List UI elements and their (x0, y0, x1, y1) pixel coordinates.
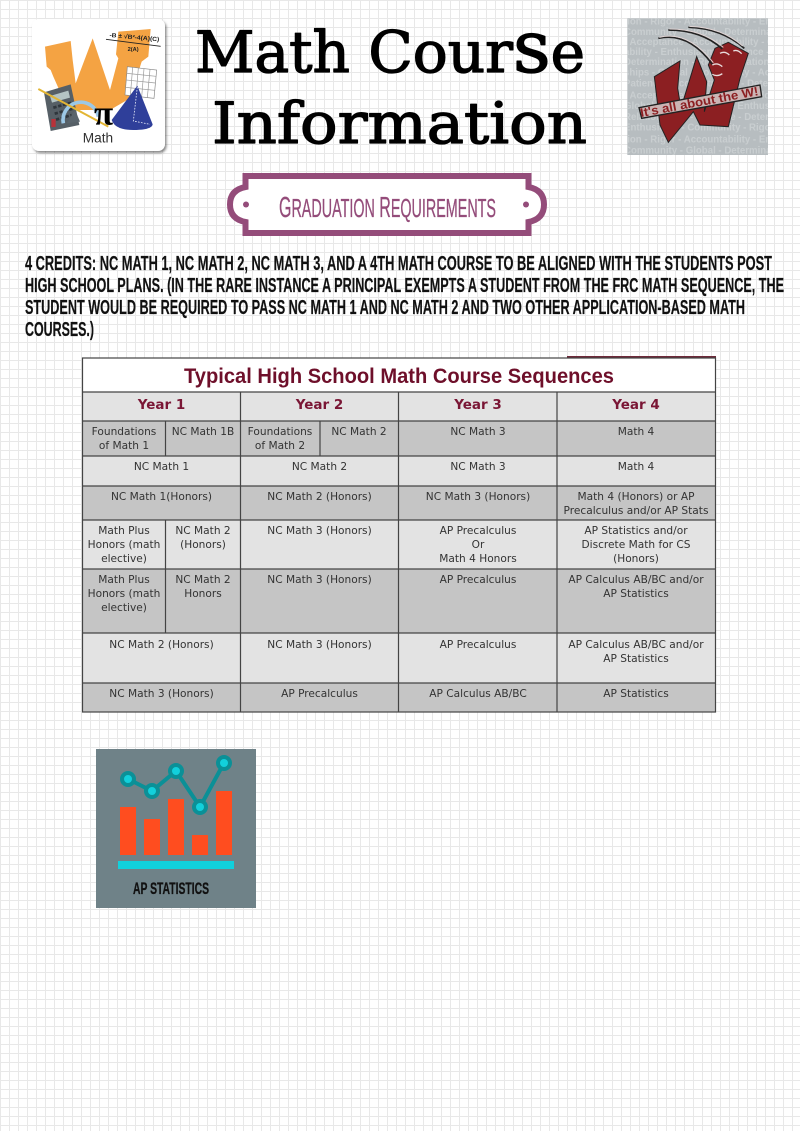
icon: math department logo: 2(A) (128, 47, 139, 53)
row 1: NC Math 2 (331, 426, 387, 438)
row 6: AP Precalculus (440, 639, 516, 651)
row 1: NC Math 1B (172, 426, 234, 438)
icon: AP statistics chart (96, 749, 256, 908)
year headers (137, 397, 660, 413)
row 7 (109, 688, 669, 700)
icon: school W logo (627, 18, 768, 155)
row 1: NC Math 3 (450, 426, 506, 438)
row 5: NC Math 2 (175, 574, 231, 586)
year headers: Year 2 (295, 397, 343, 413)
row 5: AP Calculus AB/BC and/or (568, 574, 704, 586)
banner: graduation requirements: GRADUATION REQUIREMENTS (279, 192, 496, 224)
row 5 (88, 574, 704, 614)
row 2: Math 4 (618, 461, 655, 473)
row 7: AP Calculus AB/BC (429, 688, 527, 700)
row 2: NC Math 1 (134, 461, 189, 473)
row 4: (Honors) (180, 539, 226, 551)
row 6: NC Math 2 (Honors) (109, 639, 214, 651)
row 6 (109, 639, 704, 665)
row 4: elective) (101, 553, 147, 565)
row 7: NC Math 3 (Honors) (109, 688, 214, 700)
row 4: Honors (math (88, 539, 160, 551)
row 1: of Math 1 (99, 440, 149, 452)
row 7: AP Statistics (603, 688, 669, 700)
row 2 (134, 461, 655, 473)
row 5: Math Plus (98, 574, 150, 586)
row 1: Math 4 (618, 426, 655, 438)
row 4: (Honors) (613, 553, 659, 565)
row 4: Discrete Math for CS (581, 539, 691, 551)
row 3 (111, 491, 708, 517)
row 2: NC Math 2 (292, 461, 347, 473)
year headers: Year 4 (611, 397, 660, 413)
row 4: NC Math 3 (Honors) (267, 525, 372, 537)
row 1: Foundations (248, 426, 312, 438)
row 5: NC Math 3 (Honors) (267, 574, 372, 586)
row 7: AP Precalculus (281, 688, 358, 700)
row 6: AP Calculus AB/BC and/or (568, 639, 704, 651)
row 4: Math 4 Honors (439, 553, 517, 565)
title: Information (212, 91, 587, 157)
title: Math Course (195, 5, 585, 89)
row 4: AP Statistics and/or (584, 525, 688, 537)
row 5: Honors (184, 588, 222, 600)
row 4: AP Precalculus (440, 525, 516, 537)
row 3: Precalculus and/or AP Stats (564, 505, 708, 517)
icon: school W logo: It's all about the W! (639, 84, 760, 120)
row 4: Or (472, 539, 485, 551)
row 1 (92, 426, 655, 452)
icon: math department logo: Math (83, 131, 113, 146)
row 5: Honors (math (88, 588, 160, 600)
year headers: Year 1 (137, 397, 185, 413)
text block: credit requirements (25, 253, 784, 341)
row 6: AP Statistics (603, 653, 669, 665)
row 4: Math Plus (98, 525, 150, 537)
text block: credit requirements: COURSES.) (25, 319, 94, 341)
row 5: AP Statistics (603, 588, 669, 600)
row 1: Foundations (92, 426, 156, 438)
table heading: Typical High School Math Course Sequences (184, 365, 614, 388)
icon: math department logo: π (94, 93, 113, 132)
year headers: Year 3 (453, 397, 502, 413)
row 3: NC Math 3 (Honors) (426, 491, 530, 503)
row 4 (88, 525, 691, 565)
row 1: of Math 2 (255, 440, 305, 452)
row 4: NC Math 2 (175, 525, 231, 537)
row 3: Math 4 (Honors) or AP (578, 491, 695, 503)
row 5: elective) (101, 602, 147, 614)
table: typical course sequences (82, 356, 716, 712)
row 2: NC Math 3 (450, 461, 506, 473)
icon: math department logo: -B ± √B²-4(A)(C) (109, 32, 160, 43)
row 5: AP Precalculus (440, 574, 516, 586)
row 6: NC Math 3 (Honors) (267, 639, 372, 651)
icon: math department logo (32, 19, 165, 151)
icon: school W logo: Global - Accountability - Enthusiasm (624, 101, 792, 112)
row 3: NC Math 2 (Honors) (267, 491, 372, 503)
row 3: NC Math 1(Honors) (111, 491, 212, 503)
icon: AP statistics chart: AP STATISTICS (133, 879, 209, 898)
title (195, 5, 587, 157)
banner: graduation requirements (230, 176, 544, 233)
